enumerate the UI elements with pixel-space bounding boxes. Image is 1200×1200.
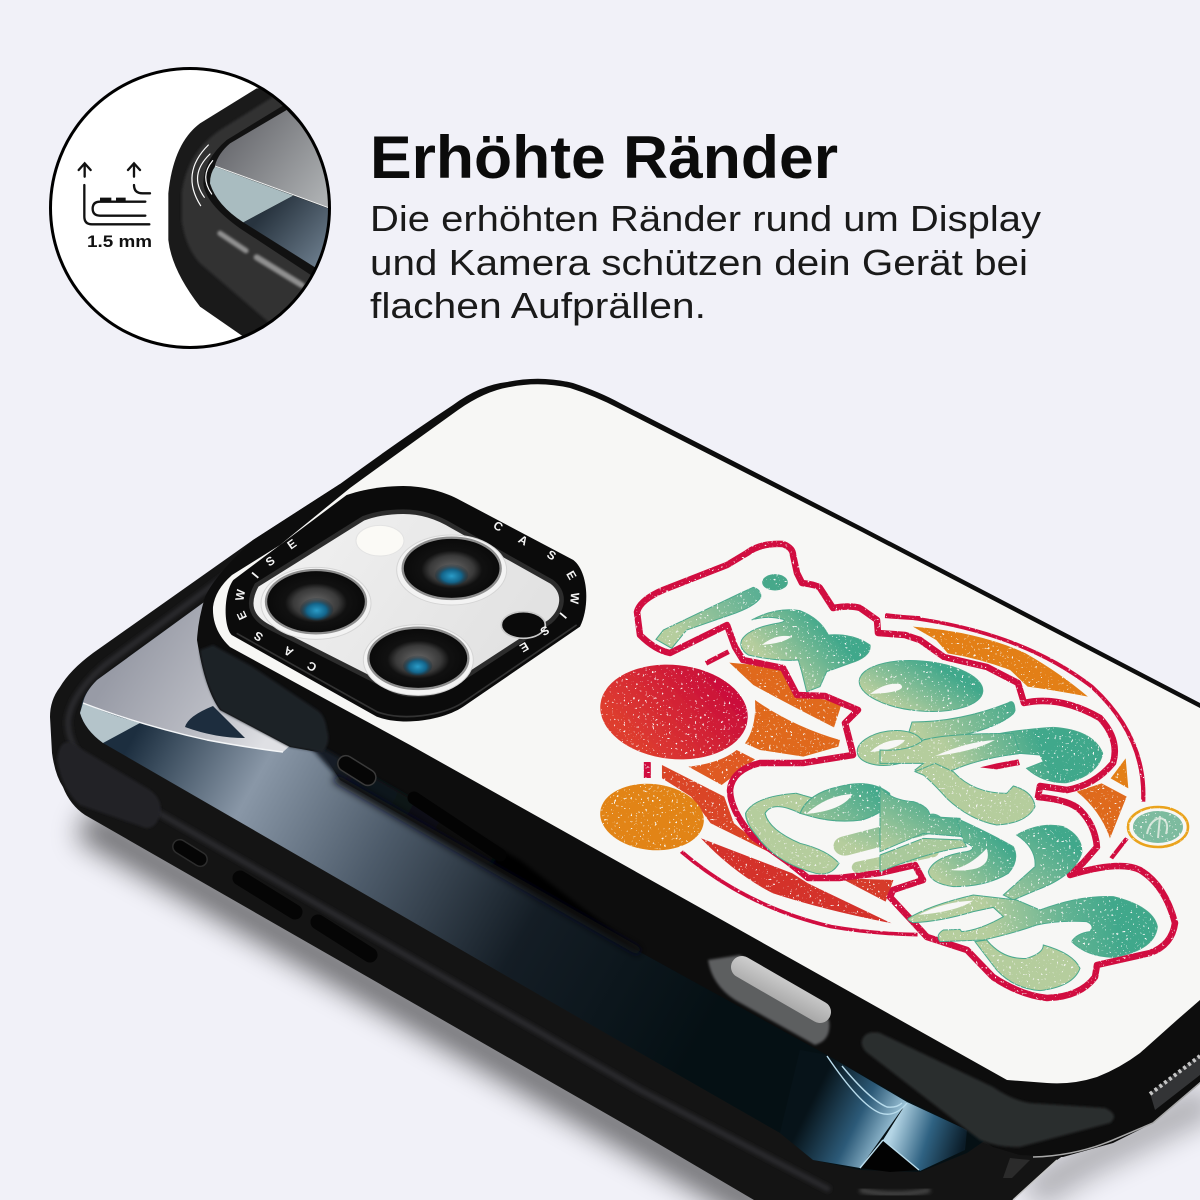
ring brand text: A — [281, 643, 296, 660]
description: und Kamera schützen dein Gerät bei — [370, 242, 1028, 283]
dark lip — [203, 106, 328, 275]
screen white line — [215, 166, 328, 208]
bumper close-up photo — [168, 88, 340, 337]
volume down — [318, 922, 370, 955]
screen reflection light — [83, 500, 340, 752]
ring brand text: S — [538, 623, 552, 639]
ring ticks — [647, 616, 920, 778]
flash — [356, 525, 404, 556]
ringer slot — [335, 753, 379, 788]
upper phone side gradient — [300, 735, 640, 952]
upper phone body — [197, 379, 1200, 1157]
bumper outer — [168, 88, 274, 336]
screen grey — [215, 110, 333, 208]
ring brand text — [232, 518, 582, 675]
orange segments right — [1077, 758, 1128, 838]
camera corner panel — [200, 645, 328, 752]
impact arcs — [192, 145, 213, 206]
ring brand text: E — [234, 609, 250, 622]
description: Die erhöhten Ränder rund um Display — [370, 198, 1041, 239]
raised edge icon — [79, 163, 150, 224]
silver button — [742, 967, 820, 1012]
description: flachen Aufprällen. — [370, 285, 706, 326]
port panel — [1150, 1055, 1200, 1110]
blue glow right — [883, 1102, 967, 1171]
lettering second word left — [746, 784, 932, 874]
glow lines — [827, 1056, 919, 1170]
lens upper right — [397, 535, 507, 605]
screen slate — [243, 196, 330, 268]
lettering top group — [656, 575, 870, 692]
ring brand text: W — [232, 588, 248, 602]
ring brand text: S — [263, 553, 277, 569]
screen pale — [210, 167, 293, 222]
lower phone bottom shine — [860, 1190, 930, 1194]
dark notch — [185, 706, 245, 738]
phone mockup — [48, 379, 1200, 1200]
artwork — [595, 544, 1188, 998]
lidar — [501, 612, 545, 638]
lettering second word right — [880, 787, 1082, 900]
orange circle — [597, 779, 707, 855]
orange segments left — [688, 663, 842, 785]
port grille — [1150, 1056, 1200, 1094]
lower phone port — [1003, 1158, 1030, 1178]
lettering second letter — [855, 656, 1015, 769]
lower phone corner panel — [57, 742, 161, 828]
camera ring lower edge — [237, 625, 577, 717]
ring brand text: I — [557, 610, 570, 621]
detail circle — [50, 68, 340, 348]
bumper inner band — [181, 97, 310, 322]
ring brand text: E — [285, 536, 299, 552]
outer ring arcs — [681, 615, 1143, 935]
action button — [170, 837, 210, 869]
upper phone side buttons — [335, 753, 829, 1045]
measurement label: 1.5 mm — [87, 232, 152, 251]
upper phone soft lower edge — [335, 778, 640, 952]
lens left — [261, 567, 371, 639]
ring brand text: S — [251, 628, 266, 644]
lettering final letter — [908, 895, 1157, 991]
ring brand text: W — [567, 592, 582, 605]
lower phone bumper — [50, 484, 1100, 1200]
long side button — [414, 798, 500, 855]
ring brand text: C — [491, 518, 506, 535]
ring brand text: I — [249, 569, 262, 581]
lower phone rim highlight — [68, 565, 830, 1190]
registered badge — [1128, 807, 1188, 847]
upper phone corner panel — [862, 1032, 1114, 1147]
white back panel — [213, 384, 1200, 1083]
cast shadow — [48, 700, 1200, 1200]
camera module — [226, 486, 586, 721]
lettering f letter — [880, 727, 1103, 825]
camera ring — [226, 486, 586, 721]
lower phone side buttons — [170, 837, 370, 955]
description — [370, 198, 1041, 326]
screen pale wedge — [80, 703, 140, 743]
red circle — [595, 658, 753, 766]
lower phone silver edge — [1013, 1160, 1057, 1200]
ring brand text: S — [544, 547, 559, 563]
red and orange segments lower — [662, 627, 1088, 923]
ring brand text: A — [516, 532, 531, 549]
circle outline — [50, 68, 330, 348]
ring brand text: C — [304, 658, 319, 675]
ring brand text: E — [563, 568, 579, 582]
rim edge shine — [1033, 1083, 1200, 1157]
blue glow left — [780, 1050, 907, 1168]
ring brand text: E — [517, 639, 531, 655]
title: Erhöhte Ränder — [370, 124, 838, 191]
volume up — [240, 878, 295, 912]
screen curve line — [83, 703, 283, 752]
lens lower — [363, 625, 473, 695]
silver button housing — [708, 955, 829, 1045]
lower phone screen — [80, 500, 1000, 1172]
lettering backing outline — [637, 544, 1175, 998]
black triangle — [860, 1140, 918, 1172]
camera glass — [251, 512, 562, 695]
highlight strips — [220, 233, 302, 285]
